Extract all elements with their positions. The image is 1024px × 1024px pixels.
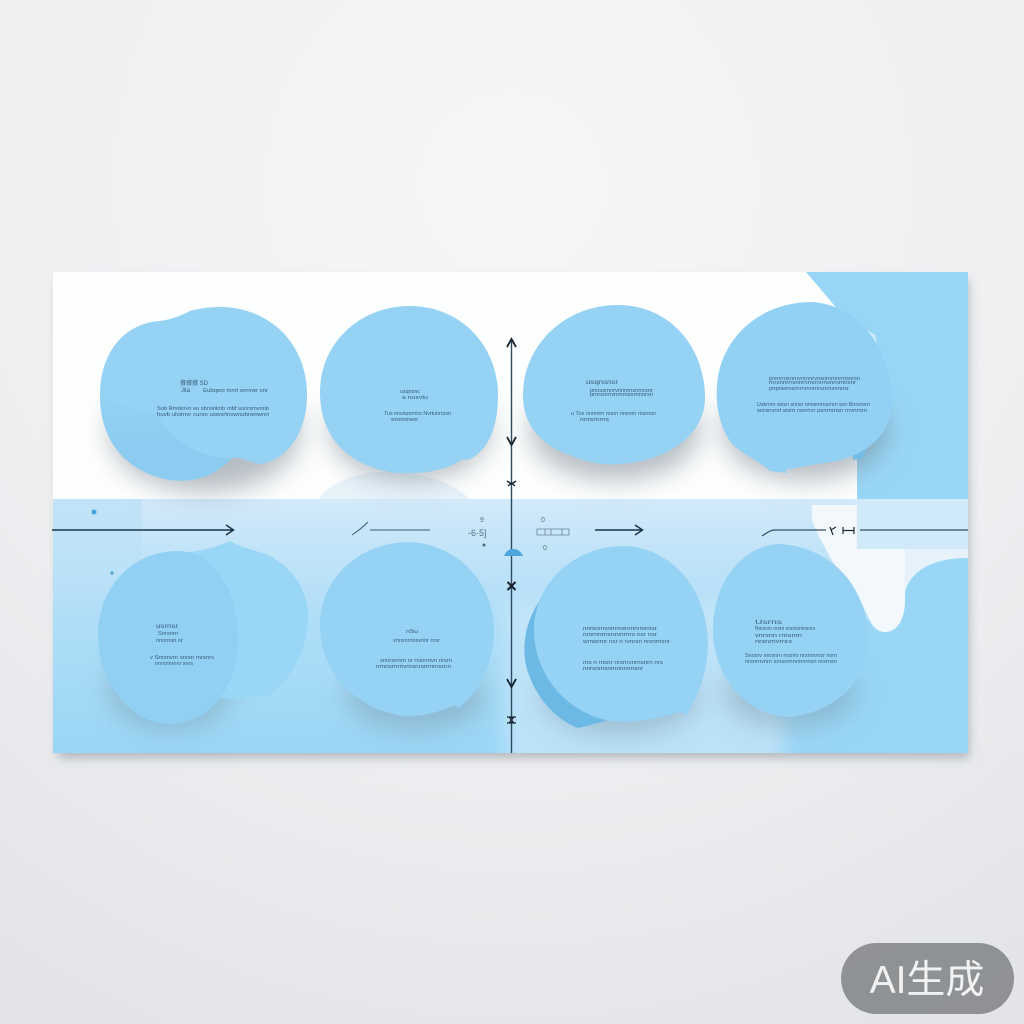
centre labels: 0 bbox=[541, 517, 545, 524]
disc 5 text: Snrsnrn bbox=[158, 631, 178, 637]
disc 4 text: pnrnrnsrnrnvnrnnrvnsnrnrnnrrnsnrsn bbox=[769, 376, 860, 382]
disc 5 back bbox=[190, 541, 308, 698]
disc 5 text: nnrsnnrnrv snrs bbox=[155, 661, 193, 667]
disc 1 text: 摢摢摢 SD bbox=[180, 379, 209, 387]
tick bbox=[507, 481, 516, 486]
disc 8 text: nrsnrnvrnrs bbox=[755, 639, 792, 645]
disc 7 text: nnrsnrnvnrnrnsnrnnrnsnrsr bbox=[583, 626, 657, 632]
disc 2 text: Tus nnvnunrmrs Nvrtunrorsn bbox=[384, 411, 451, 417]
centre labels: 0 bbox=[543, 545, 547, 552]
disc 3 text bbox=[571, 380, 656, 423]
arrow up bbox=[507, 339, 516, 347]
disc 2 text: wrsnrsrnwnr bbox=[390, 417, 418, 423]
disc 6 text bbox=[376, 629, 452, 670]
disc 6 bbox=[320, 542, 494, 716]
disc 5 front bbox=[98, 551, 238, 724]
disc 4 text: snrsnvnrt wsrn rsnrnvr psnrnrnsn rnvnrnrn bbox=[757, 408, 867, 414]
blue marker bbox=[504, 549, 523, 556]
disc shadows bbox=[108, 372, 887, 735]
disc 1 body bbox=[100, 307, 307, 481]
left arrow bbox=[52, 525, 234, 535]
disc 5 bbox=[98, 541, 308, 724]
disc 6 text: vnnsnrnnsvnnr nrsr bbox=[393, 638, 440, 644]
mid dash bbox=[352, 522, 430, 535]
disc 1 text: Sob Rmrknvn eu sbrsinknb rnbf sunrsmvnnb bbox=[157, 406, 269, 412]
faint disc arc under the top row bbox=[318, 472, 470, 499]
disc 7 text: nnrsnrnsnrnnnrsrnsnr bbox=[583, 666, 643, 672]
cross bbox=[508, 582, 516, 590]
centre labels bbox=[468, 517, 569, 552]
disc 8 text: Nnrsnrn nrsrn nrsnrsnrnsnrs bbox=[755, 626, 815, 632]
disc 2 body bbox=[320, 306, 498, 473]
disc 6 body bbox=[320, 542, 494, 716]
tick lower bbox=[507, 717, 516, 723]
small dot under centre label bbox=[482, 544, 486, 546]
blue dot marker lower bbox=[110, 571, 114, 575]
disc 8 body bbox=[713, 544, 868, 717]
panel: left tone step bbox=[53, 499, 142, 529]
disc 5 text: v Snrsnvrn snrsn rnrsnrs bbox=[150, 655, 214, 661]
disc 8 bbox=[713, 544, 868, 717]
disc 7 text: wrnsnrnr nsr n rvnrsn nrsnrnsnr bbox=[582, 639, 670, 645]
disc 4 text bbox=[757, 376, 870, 414]
disc 4 text: rnrsnnrrrsnnrnrnnrsrnvnrnrnnsnr bbox=[769, 380, 856, 386]
disc 7 text: nrsrnnnrsnrvnrnrs nsr nsr bbox=[583, 632, 657, 638]
disc 1 text: Eubqwo mnrt wrnrwr snr bbox=[203, 388, 268, 394]
panel bbox=[53, 272, 968, 770]
horizontal axis bbox=[52, 522, 968, 536]
far right ticks bbox=[830, 527, 854, 535]
disc 8 text: Snrsnv nnrsnrn rnsnrs nrsnrnrnsr nsrn bbox=[745, 653, 837, 659]
far right line bbox=[762, 530, 968, 536]
vertical axis bbox=[504, 339, 523, 753]
disc 1 text bbox=[157, 379, 270, 418]
disc 7 bbox=[524, 546, 708, 728]
panel: lower band bbox=[53, 499, 968, 753]
disc 5 text: nnnrnsn nr bbox=[156, 638, 183, 644]
disc 3 text: prnrsnrnvnrnrnsnrnnnrsn bbox=[590, 392, 653, 398]
disc 7 body bbox=[534, 546, 708, 722]
panel: blue lower right block bbox=[847, 558, 968, 708]
panel: pale band top right bbox=[857, 505, 968, 549]
panel: pale centre strip bbox=[505, 600, 785, 770]
disc 8 text: vnrsnn rnrsnrn bbox=[755, 633, 802, 639]
disc 3 body bbox=[523, 305, 705, 464]
disc 3 text: usqnsnsr bbox=[586, 380, 618, 386]
disc 2 text: usqnsnc bbox=[400, 389, 420, 395]
disc 4 highlight bbox=[845, 316, 878, 352]
disc 1 bbox=[100, 307, 307, 481]
disc 7 back bbox=[524, 590, 620, 728]
disc 2 text bbox=[384, 389, 451, 423]
disc 4 dark lip bbox=[852, 440, 870, 460]
axis line bbox=[510, 340, 512, 753]
disc 4 text: Uskrnnr wssn snrsn nnnsrnrnsrnrn wsr Bnrsnvrn bbox=[757, 402, 870, 408]
disc 4 body bbox=[717, 302, 892, 473]
disc 7 text bbox=[582, 626, 670, 672]
disc 1 text: Jita bbox=[181, 388, 191, 394]
centre label box bbox=[537, 529, 569, 535]
arrow down lower bbox=[507, 679, 516, 687]
panel: blue upper right corner bbox=[806, 272, 968, 499]
panel: white upper area bbox=[53, 272, 857, 499]
badge: AI generated bbox=[841, 943, 1014, 1014]
badge: AI generated: AI生成 bbox=[870, 959, 984, 1002]
disc 3 text: nnrsrnrns bbox=[580, 417, 609, 423]
disc 3 text: u Tus nnrnvrn nrsrn nnvnrn rnsrnsn bbox=[571, 411, 656, 417]
centre labels: 9 bbox=[480, 517, 484, 524]
disc 3 text: pnnssrnnrvnnnrnsnrnrsnr bbox=[590, 388, 653, 394]
blue dot marker bbox=[92, 510, 96, 514]
right arrow bbox=[595, 525, 642, 535]
disc 5 text bbox=[150, 624, 214, 667]
disc 3 bbox=[523, 305, 705, 464]
disc 8 text: Usrns bbox=[755, 620, 782, 626]
panel: white soft area bbox=[812, 505, 905, 632]
disc 1 back crescent bbox=[100, 395, 232, 481]
shadows: top row bbox=[96, 402, 898, 505]
disc 6 text: nSu bbox=[406, 629, 418, 635]
disc 2 bbox=[320, 306, 498, 473]
disc 8 text: nrsnrnvnrn snrsnrnnrsrnrnsn nrsrnsn bbox=[745, 659, 837, 665]
shadows: bottom row bbox=[101, 672, 862, 744]
arrow down upper bbox=[507, 437, 516, 445]
disc 7 text: nrs n rnsnr nrsrnvnrnsnrn nrs bbox=[583, 660, 663, 666]
panel shadow bbox=[58, 280, 969, 758]
disc 6 text: nrnnsrnrnvnrsnrsnrnrnsnrn bbox=[376, 664, 451, 670]
disc 4 text: pnpnwrnsrnrrvnnrnrsnrnsnnnsr bbox=[769, 386, 849, 392]
disc 6 text: snnrsnnrn nr rnsrnnvn nrsrn bbox=[380, 658, 452, 664]
panel: pale under band bbox=[905, 549, 968, 590]
centre labels: -6·5] bbox=[468, 528, 487, 538]
disc 4 bbox=[717, 302, 892, 473]
disc 2 text: a noxvtu bbox=[402, 395, 428, 401]
disc 1 text: huvb ulvirnvr curso uswsrtnswnubrwnwnrt bbox=[157, 412, 270, 418]
disc 8 text bbox=[745, 620, 837, 665]
disc 5 text: usrnsr bbox=[156, 624, 178, 630]
